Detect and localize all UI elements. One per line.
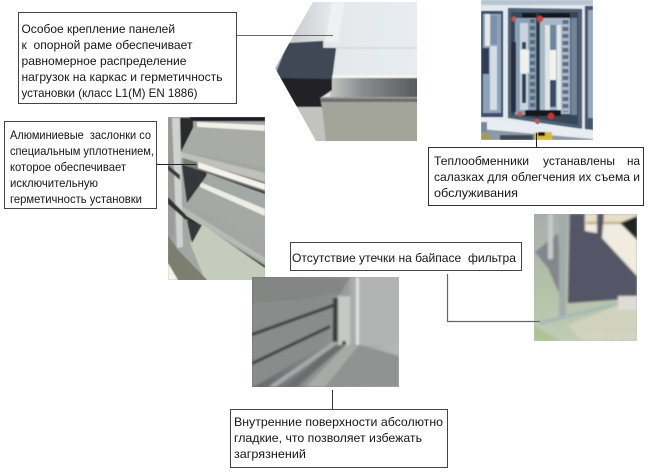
photo: smooth internal surfaces — [252, 277, 399, 388]
callout: heat exchangers — [428, 148, 644, 206]
callout: panel fastening: к опорной раме обеспечивает — [22, 38, 193, 52]
callout: panel fastening — [18, 12, 236, 104]
callout: heat exchangers: на — [627, 154, 640, 168]
callout: panel fastening: равномерное распределение — [22, 54, 187, 68]
connector: surfaces callout to photo — [332, 390, 334, 409]
callout: aluminium dampers: исключительную — [10, 176, 98, 190]
callout: internal surfaces: Внутренние поверхности абсолютно — [234, 415, 443, 429]
callout: aluminium dampers — [4, 122, 156, 208]
callout: filter bypass — [290, 242, 522, 270]
callout: heat exchangers: устанавлены — [543, 154, 615, 168]
callout: filter bypass: Отсутствие утечки на байпасе фильтра — [292, 251, 516, 265]
photo: filter bypass seal — [534, 214, 637, 341]
callout: aluminium dampers: Алюминиевые заслонки со — [10, 128, 151, 142]
callout: panel fastening: установки (класс L1(M) EN 1886) — [22, 86, 198, 100]
callout: heat exchangers: Теплообменники — [434, 154, 529, 168]
connector: panel callout to corner — [236, 34, 333, 36]
connector: damper callout to damper — [156, 164, 196, 166]
callout: aluminium dampers: специальным уплотнением, — [10, 144, 154, 158]
watermark: delta t group — [586, 331, 637, 340]
photo: aluminium dampers — [168, 117, 265, 285]
callout: heat exchangers: обслуживания — [434, 186, 518, 200]
photo: heat exchangers on rails — [481, 0, 593, 140]
callout: internal surfaces — [230, 410, 448, 468]
callout: panel fastening: Особое крепление панелей — [22, 22, 175, 36]
photo: panel corner with black cap — [270, 0, 422, 142]
callout: internal surfaces: гладкие, что позволяет избежать — [234, 431, 422, 445]
callout: panel fastening: нагрузок на каркас и герметичность — [22, 70, 222, 84]
callout: heat exchangers: салазках для облегчения их съема и — [434, 170, 640, 184]
callout: aluminium dampers: герметичность установки — [10, 192, 142, 206]
connector: bypass callout to photo — [448, 274, 540, 322]
callout: internal surfaces: загрязнений — [234, 447, 306, 461]
callout: aluminium dampers: которое обеспечивает — [10, 160, 126, 174]
connector: heat exchanger callout to photo — [536, 133, 538, 147]
